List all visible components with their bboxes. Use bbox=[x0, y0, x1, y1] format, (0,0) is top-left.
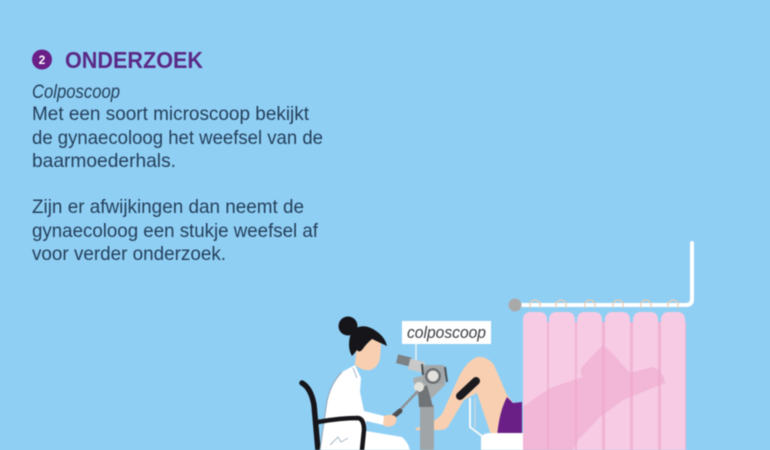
illustration: gynaecologist bbox=[302, 316, 410, 450]
patient leg bbox=[416, 357, 514, 437]
step number badge: 2 bbox=[39, 53, 46, 67]
chair arm bbox=[318, 418, 364, 450]
heading: ONDERZOEK bbox=[65, 47, 203, 73]
hand bbox=[383, 415, 396, 427]
label: colposcoop bbox=[402, 321, 491, 360]
text block: follow-up bbox=[32, 196, 319, 265]
illustration: curtain bbox=[523, 312, 686, 450]
purple garment bbox=[497, 397, 522, 437]
text block: colposcoop description: de gynaecoloog het weefsel van de bbox=[32, 127, 323, 149]
label: colposcoop: colposcoop bbox=[407, 323, 486, 342]
illustration: colposcope bbox=[394, 354, 447, 450]
hair bun bbox=[338, 316, 358, 336]
illustration: curtain rail bbox=[508, 243, 692, 312]
text block: follow-up: gynaecoloog een stukje weefsel af bbox=[32, 220, 319, 242]
stirrup bbox=[460, 381, 482, 436]
text block: colposcoop description bbox=[32, 82, 323, 172]
text block: follow-up: voor verder onderzoek. bbox=[32, 243, 226, 265]
chair back bbox=[302, 383, 318, 450]
neck and face bbox=[355, 337, 381, 370]
seat bbox=[481, 433, 524, 450]
hair bbox=[349, 326, 387, 356]
text block: colposcoop description: Colposcoop bbox=[32, 82, 120, 103]
step number badge bbox=[32, 50, 52, 70]
trousers and coat bbox=[320, 365, 410, 450]
illustration: patient on chair bbox=[416, 357, 524, 450]
patient silhouette behind curtain bbox=[523, 345, 665, 450]
text block: colposcoop description: baarmoederhals. bbox=[32, 150, 176, 172]
text block: colposcoop description: Met een soort microscoop bekijkt bbox=[32, 103, 310, 125]
text block: follow-up: Zijn er afwijkingen dan neemt de bbox=[32, 196, 304, 218]
